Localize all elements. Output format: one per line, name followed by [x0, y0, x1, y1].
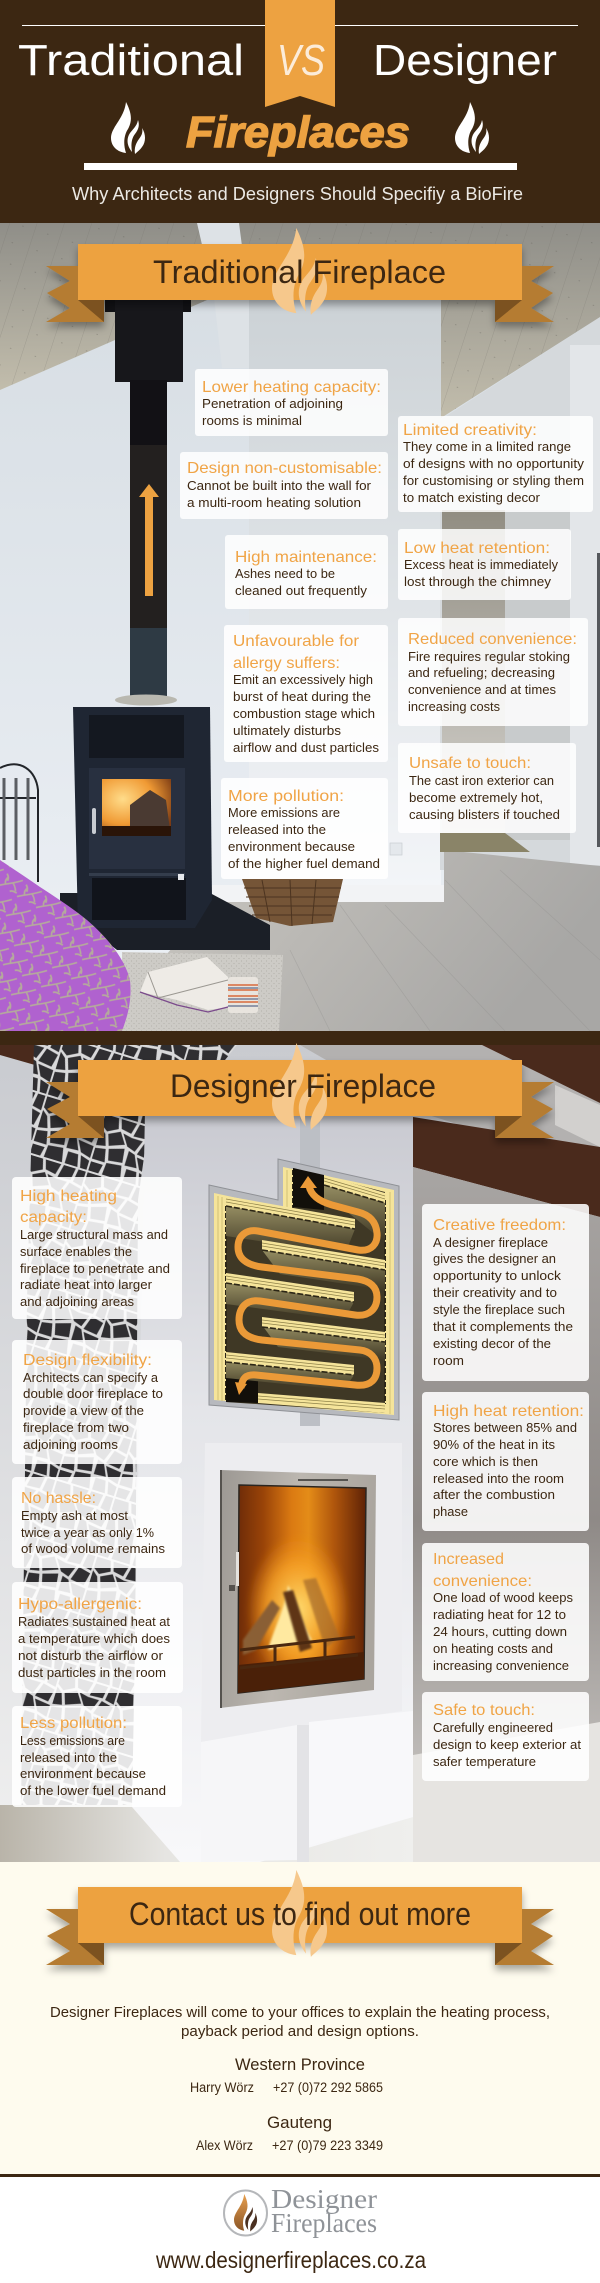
icon: banner flame [272, 1870, 327, 1957]
heading: Contact us to find out more [129, 1896, 471, 1932]
card title [433, 1551, 532, 1590]
card body: twice a year as only 1% [21, 1526, 154, 1540]
card body [433, 1591, 573, 1673]
card body: Carefully engineered [433, 1721, 553, 1735]
card body: safer temperature [433, 1755, 536, 1769]
rug [122, 952, 283, 1031]
banner: Designer Fireplace [46, 1043, 554, 1138]
card: less pollution [12, 1706, 182, 1807]
card title: capacity: [20, 1209, 87, 1226]
card: creative freedom [422, 1204, 589, 1381]
card body: burst of heat during the [233, 690, 371, 704]
card body: of the lower fuel demand [20, 1784, 166, 1798]
card title: Creative freedom: [433, 1217, 566, 1234]
card: design flexibility [12, 1340, 182, 1464]
card body: environment because [228, 840, 355, 854]
card body: a multi-room heating solution [187, 496, 361, 510]
card body: become extremely hot, [409, 791, 543, 805]
card body: provide a view of the [23, 1404, 144, 1418]
card body [21, 1509, 165, 1556]
card body: double door fireplace to [23, 1387, 163, 1401]
card body: Architects can specify a [23, 1371, 158, 1385]
card: high maintenance [225, 535, 388, 609]
chimney breast [132, 1110, 413, 1862]
card body: core which is then [433, 1455, 538, 1469]
card body: Large structural mass and [20, 1228, 168, 1242]
firebox door [220, 1470, 376, 1708]
card body [408, 650, 570, 714]
card body [433, 1421, 577, 1519]
card body: a temperature which does [18, 1632, 170, 1646]
card title [233, 633, 360, 672]
contact intro: Designer Fireplaces will come to your offices to explain the heating process, [50, 2004, 550, 2021]
card body: fireplace to penetrate and [20, 1262, 170, 1276]
photo: masonry fireplace [0, 1045, 600, 1862]
card: safe to touch [422, 1692, 589, 1781]
card title: Increased [433, 1551, 504, 1568]
card body: The cast iron exterior can [409, 774, 554, 788]
card title: No hassle: [21, 1490, 96, 1507]
card body: More emissions are [228, 806, 340, 820]
card body: design to keep exterior at [433, 1738, 582, 1752]
title: Traditional: Traditional [18, 36, 244, 85]
card: no hassle [12, 1477, 182, 1568]
card body [433, 1721, 582, 1769]
icon: left flame [111, 102, 145, 154]
website url: www.designerfireplaces.co.za [155, 2247, 426, 2273]
heading: Designer Fireplace [170, 1068, 436, 1104]
card body [404, 558, 559, 589]
card body: of wood volume remains [21, 1542, 165, 1556]
stove body [73, 707, 212, 928]
panel: contact [0, 1862, 600, 2174]
card body [409, 774, 560, 822]
card body: phase [433, 1505, 468, 1519]
card: high heat retention [422, 1392, 589, 1531]
orange serpentine arrow [235, 1176, 377, 1395]
card body: convenience and at times [408, 683, 556, 697]
contact: Gauteng [196, 2113, 383, 2153]
card body: after the combustion [433, 1488, 555, 1502]
card body: Emit an excessively high [233, 673, 373, 687]
mosaic stone column [21, 1045, 237, 1810]
card body: surface enables the [20, 1245, 132, 1259]
card body: A designer fireplace [433, 1236, 548, 1250]
card body: Radiates sustained heat at [18, 1615, 171, 1629]
card: unfavourable for allergy suffers [224, 625, 388, 762]
floor [0, 1805, 413, 1862]
panel: traditional fireplace [0, 223, 600, 1031]
card body [187, 479, 371, 510]
card body [20, 1228, 170, 1309]
card body: fireplace from two [23, 1421, 129, 1435]
card title: Less pollution: [20, 1715, 127, 1732]
panel: designer fireplace [0, 1043, 600, 1862]
card title: convenience: [433, 1573, 532, 1590]
card body: opportunity to unlock [433, 1269, 562, 1283]
title: Designer: Designer [373, 36, 557, 85]
logo wordmark: Fireplaces [271, 2208, 377, 2238]
card body: for customising or styling them [403, 474, 584, 488]
contact: Gauteng: +27 (0)79 223 3349 [272, 2138, 383, 2153]
card: lower heating capacity [195, 369, 388, 436]
floor [100, 850, 600, 1031]
card body [228, 806, 380, 871]
card title: More pollution: [228, 788, 344, 805]
card body: cleaned out frequently [235, 584, 368, 598]
card body: on heating costs and [433, 1642, 553, 1656]
stove pipe [105, 300, 191, 312]
arrow: heat rising through chimney [139, 484, 159, 596]
card body: Empty ash at most [21, 1509, 129, 1523]
banner: Contact us [46, 1870, 554, 1965]
contact intro [50, 2004, 550, 2040]
fire tools [0, 764, 38, 882]
contact: Western Province [190, 2055, 383, 2095]
card title: Unfavourable for [233, 633, 360, 650]
heat flow diagram [209, 1159, 399, 1420]
card body: gives the designer an [433, 1252, 556, 1266]
card: increased convenience [422, 1543, 589, 1681]
icon: banner flame [272, 228, 327, 315]
card body: increasing convenience [433, 1659, 569, 1673]
card title: Limited creativity: [403, 422, 537, 439]
card body: Fire requires regular stoking [408, 650, 570, 664]
card body: rooms is minimal [202, 414, 302, 428]
card body: They come in a limited range [403, 440, 571, 454]
card body: radiating heat for 12 to [433, 1608, 566, 1622]
contact: Gauteng: Gauteng [267, 2113, 332, 2132]
card body: that it complements the [433, 1320, 573, 1334]
card body: Cannot be built into the wall for [187, 479, 371, 493]
card body: of designs with no opportunity [403, 457, 585, 471]
card body: combustion stage which [233, 707, 375, 721]
card body: ultimately disturbs [233, 724, 341, 738]
contact intro: payback period and design options. [181, 2023, 419, 2040]
card body: dust particles in the room [18, 1666, 166, 1680]
card body [202, 397, 343, 428]
logo wordmark: Designer [271, 2184, 377, 2214]
card body [403, 440, 585, 505]
title: VS: VS [277, 36, 325, 85]
card body: causing blisters if touched [409, 808, 560, 822]
card: unsafe to touch [398, 743, 576, 833]
card title: High maintenance: [235, 549, 377, 566]
card body: airflow and dust particles [233, 741, 379, 755]
card body: not disturb the airflow or [18, 1649, 163, 1663]
card body [433, 1236, 573, 1368]
contact: Western Province: Harry Wörz [190, 2080, 254, 2095]
card body: style the fireplace such [433, 1303, 565, 1317]
title: Fireplaces: Fireplaces [186, 108, 410, 157]
card body: of the higher fuel demand [228, 857, 380, 871]
card body: to match existing decor [403, 491, 540, 505]
photo: room with wood stove [0, 223, 600, 1031]
card title: Hypo-allergenic: [18, 1596, 142, 1613]
card: design non-customisable [180, 452, 388, 519]
icon: orange bookmark ribbon [265, 0, 335, 107]
card title: Safe to touch: [433, 1702, 535, 1719]
card body: and refueling; decreasing [408, 666, 555, 680]
logo wordmark [271, 2184, 377, 2238]
card body: radiate heat into larger [20, 1278, 152, 1292]
card body: Stores between 85% and [433, 1421, 577, 1435]
card body: increasing costs [408, 700, 500, 714]
card body: existing decor of the [433, 1337, 551, 1351]
card title: Unsafe to touch: [409, 755, 531, 772]
card body: lost through the chimney [404, 575, 552, 589]
subtitle: Why Architects and Designers Should Specifiy a BioFire [72, 184, 523, 204]
card title: High heating [20, 1188, 117, 1205]
card title: Design non-customisable: [187, 460, 382, 477]
card title [20, 1188, 117, 1226]
logo [224, 2184, 377, 2238]
logo mark [224, 2190, 267, 2236]
card body: One load of wood keeps [433, 1591, 573, 1605]
card body: their creativity and to [433, 1286, 557, 1300]
footer [0, 2177, 600, 2283]
purple beanbag [0, 860, 131, 1031]
card title: Reduced convenience: [408, 631, 577, 648]
card body: and adjoining areas [20, 1295, 134, 1309]
card body: released into the room [433, 1472, 564, 1486]
card title: allergy suffers: [233, 655, 340, 672]
card body: released into the [20, 1751, 117, 1765]
heading: Traditional Fireplace [153, 254, 446, 290]
contact: Western Province: +27 (0)72 292 5865 [273, 2080, 383, 2095]
card title: Design flexibility: [23, 1352, 152, 1369]
baffles [226, 1175, 385, 1413]
basket [242, 879, 343, 926]
card: low heat retention [398, 529, 571, 600]
card body: Excess heat is immediately [404, 558, 559, 572]
card: hypo-allergenic [12, 1582, 183, 1693]
cup [228, 977, 258, 1013]
contact: Western Province: Western Province [235, 2055, 365, 2074]
header panel [0, 0, 600, 223]
icon: right flame [455, 102, 489, 154]
fireplace recess [201, 1443, 402, 1742]
card body: adjoining rooms [23, 1438, 118, 1452]
card: more pollution [221, 778, 388, 879]
card body: Penetration of adjoining [202, 397, 343, 411]
card body [23, 1371, 163, 1452]
card body: environment because [20, 1767, 146, 1781]
book [140, 957, 230, 1010]
card body: 24 hours, cutting down [433, 1625, 567, 1639]
contact: Gauteng: Alex Wörz [196, 2138, 253, 2153]
card: high heating capacity [12, 1177, 182, 1319]
icon: banner flame [272, 1043, 327, 1130]
card body: 90% of the heat in its [433, 1438, 555, 1452]
card title: Lower heating capacity: [202, 379, 381, 396]
card title: Low heat retention: [404, 540, 550, 557]
card body: Less emissions are [20, 1734, 125, 1748]
card: reduced convenience [398, 618, 588, 726]
card body [18, 1615, 171, 1680]
card title: High heat retention: [433, 1403, 584, 1420]
card body [233, 673, 379, 755]
hearth [60, 893, 270, 950]
card body: Ashes need to be [235, 567, 335, 581]
card body [235, 567, 368, 598]
card body: released into the [228, 823, 326, 837]
banner: Traditional Fireplace [46, 228, 554, 322]
card body [20, 1734, 166, 1798]
card: limited creativity [398, 416, 593, 512]
card body: room [433, 1354, 464, 1368]
